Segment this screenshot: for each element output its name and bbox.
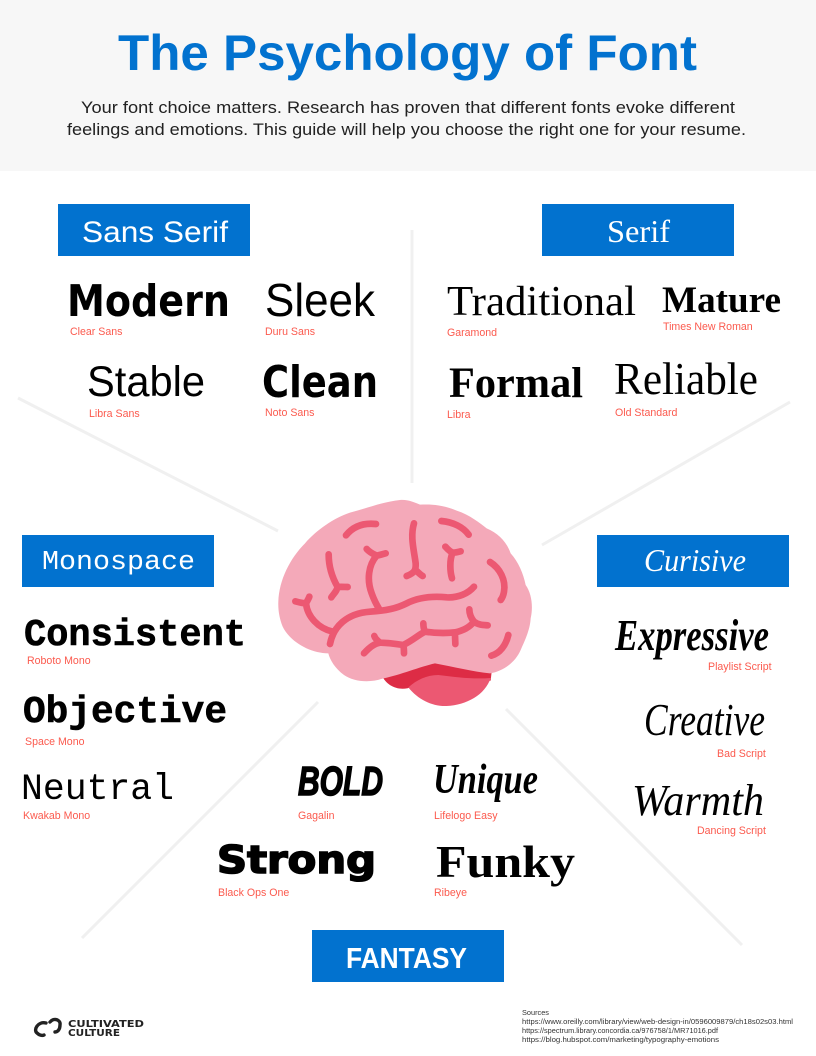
sample: sleek: Duru Sans [265, 326, 315, 338]
sample: funky: Ribeye [434, 887, 467, 899]
heading: fantasy: FANTASY [346, 943, 467, 975]
sources: https://www.oreilly.com/library/view/web-design-in/0596009879/ch18s02s03.html [522, 1019, 793, 1026]
sample: modern: Clear Sans [70, 326, 122, 338]
heading: monospace: Monospace [42, 548, 195, 578]
panel: fantasy [217, 757, 575, 982]
heading: cursive: Curisive [644, 542, 746, 578]
sample: strong: Black Ops One [218, 887, 289, 899]
sample: consistent: Roboto Mono [27, 655, 91, 667]
intro text: Your font choice matters. Research has proven that different fonts evoke different [81, 98, 735, 117]
panel: sans serif [58, 204, 378, 420]
sample: unique: Unique [433, 757, 538, 803]
sample: traditional: Garamond [447, 327, 497, 339]
intro text: feelings and emotions. This guide will help you choose the right one for your resume. [67, 120, 746, 139]
sample: mature: Times New Roman [663, 321, 753, 333]
sample: modern: Modern [67, 276, 230, 327]
sample: expressive: Expressive [614, 611, 769, 660]
sample: expressive [614, 611, 772, 673]
cerebellum [382, 660, 492, 706]
sample: bold: Gagalin [298, 810, 335, 822]
grooves [295, 521, 508, 656]
sample: bold: BOLD [298, 758, 383, 804]
heading: serif [542, 204, 734, 256]
logo text [68, 1019, 144, 1039]
sample: formal: Formal [449, 360, 583, 407]
heading: monospace [22, 535, 214, 587]
sample: mature: Mature [662, 280, 781, 321]
heading: sans serif [58, 204, 250, 256]
sample: unique [433, 757, 538, 822]
sample: sleek: Sleek [265, 274, 376, 326]
sample: strong: Strong [217, 838, 376, 882]
sample: funky: Funky [436, 836, 575, 887]
icon: brain [278, 500, 532, 706]
intro text [67, 98, 746, 139]
title: The Psychology of Font [118, 25, 697, 81]
panel: cursive [597, 535, 789, 837]
heading: sans serif: Sans Serif [82, 216, 229, 249]
sample: clean: Noto Sans [265, 407, 314, 419]
sample: formal: Libra [447, 409, 471, 421]
logo text: CULTURE [68, 1028, 120, 1039]
sample: objective: Objective [23, 691, 227, 734]
sample: bold [298, 758, 383, 822]
sample: unique: Lifelogo Easy [434, 810, 498, 822]
sample: creative: Bad Script [717, 748, 766, 760]
logo text: CULTIVATED [68, 1019, 144, 1030]
sample: clean: Clean [262, 357, 378, 408]
sample: reliable: Old Standard [615, 407, 678, 419]
sample: creative [644, 694, 766, 760]
logo mark [36, 1019, 60, 1035]
sample: consistent: Consistent [24, 614, 246, 657]
panel: monospace [21, 535, 246, 822]
sources: https://blog.hubspot.com/marketing/typography-emotions [522, 1037, 720, 1044]
heading: cursive [597, 535, 789, 587]
panel: serif [447, 204, 781, 421]
sample: neutral: Neutral [21, 769, 174, 811]
heading: fantasy [312, 930, 504, 982]
sources: https://spectrum.library.concordia.ca/976758/1/MR71016.pdf [522, 1028, 718, 1035]
logo: cultivated culture [36, 1019, 144, 1039]
sample: stable: Libra Sans [89, 408, 140, 420]
cerebrum [278, 500, 532, 681]
sources: Sources [522, 1010, 550, 1017]
heading: serif: Serif [607, 213, 670, 249]
sample: objective: Space Mono [25, 736, 85, 748]
sample: strong [217, 838, 376, 899]
sample: neutral: Kwakab Mono [23, 810, 90, 822]
sample: traditional: Traditional [447, 279, 636, 325]
sources [522, 1010, 793, 1044]
sample: expressive: Playlist Script [708, 661, 772, 673]
header band [0, 0, 816, 171]
sample: reliable: Reliable [614, 354, 758, 404]
sample: stable: Stable [87, 358, 205, 406]
sample: creative: Creative [644, 694, 765, 745]
sample: warmth: Dancing Script [697, 825, 766, 837]
sample: warmth: Warmth [632, 776, 764, 825]
